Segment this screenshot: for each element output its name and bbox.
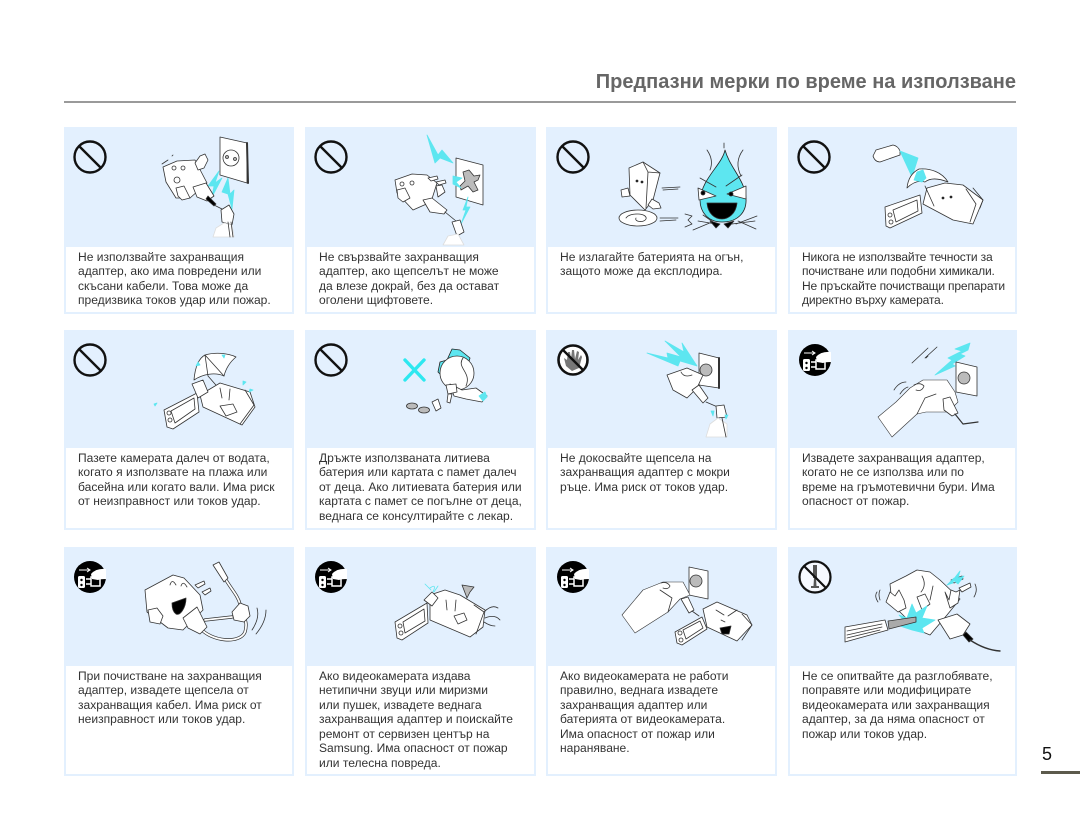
text block: опасност от пожар. — [802, 494, 909, 508]
text block: При почистване на захранващия — [78, 668, 262, 682]
illustration: battery and flame — [619, 143, 757, 230]
text block: батерията от видеокамерата. — [560, 712, 725, 726]
icon: prohibition — [558, 142, 588, 172]
text block: батерия или картата с памет далеч — [319, 465, 517, 479]
text block: ръце. Има риск от токов удар. — [560, 480, 728, 494]
text block: Никога не използвайте течности за — [802, 250, 993, 264]
text block — [790, 448, 1015, 528]
text block: Не излагайте батерията на огън, — [560, 250, 743, 264]
illustration: unplugging a malfunctioning camera — [622, 567, 752, 645]
icon: prohibition — [74, 142, 106, 172]
text block: поправяте или модифицирате — [802, 683, 971, 697]
text block — [307, 247, 534, 312]
illustration: camera under umbrella — [154, 353, 255, 429]
panel: wet hands — [546, 330, 777, 530]
illustration: adapter and cable — [145, 562, 266, 640]
text block: ремонт от сервизен център на — [319, 726, 489, 740]
icon: prohibition — [316, 344, 346, 376]
text block — [548, 247, 775, 312]
text block: адаптер, извадете щепсела от — [78, 683, 249, 697]
text block: от деца. Ако литиевата батерия или — [319, 480, 522, 494]
text block: видеокамерата или захранващия — [802, 698, 990, 712]
text block: Дръжте използваната литиева — [319, 450, 490, 464]
panel: malfunction — [546, 547, 777, 776]
panel: loose plug — [305, 127, 536, 314]
text block: Ако видеокамерата издава — [319, 668, 471, 682]
text block — [66, 247, 292, 312]
panel: battery in fire — [546, 127, 777, 314]
text block — [66, 448, 292, 528]
icon: prohibition — [316, 142, 346, 172]
text block: захранващия адаптер и поискайте — [319, 712, 513, 726]
text block — [307, 666, 534, 774]
text block: Извадете захранващия адаптер, — [802, 450, 985, 464]
text block — [790, 666, 1015, 774]
text block: от неизправност или токов удар. — [78, 494, 261, 508]
text block — [307, 448, 534, 528]
panel: do not disassemble — [788, 547, 1017, 776]
text block: захранващия кабел. Има риск от — [78, 698, 262, 712]
illustration: spray on camera — [873, 145, 983, 228]
text block: правилно, веднага извадете — [560, 683, 718, 697]
text block: адаптер, за да няма опасност от — [802, 712, 985, 726]
illustration: wet hand touching plug — [647, 341, 728, 437]
text block: скъсани кабели. Това може да — [78, 278, 248, 292]
panel: keep away from water — [64, 330, 294, 530]
text block: Не използвайте захранващия — [78, 250, 244, 264]
title: Предпазни мерки по време на използване — [596, 71, 1016, 93]
text block: нетипични звуци или миризми — [319, 683, 488, 697]
text block: картата с памет се погълне от деца, — [319, 494, 522, 508]
icon: no disassembly — [800, 562, 830, 592]
text block: захранващия адаптер или — [560, 698, 707, 712]
text block: или пушек, извадете веднага — [319, 698, 482, 712]
illustration: screwdriver into adapter — [845, 570, 1000, 651]
illustration: unplugging in a storm — [878, 343, 978, 437]
text block: басейна или когато вали. Има риск — [78, 480, 275, 494]
panel: cleaning liquids — [788, 127, 1017, 314]
text block: Не пръскайте почистващи препарати — [802, 278, 1005, 292]
text block: Samsung. Има опасност от пожар — [319, 741, 508, 755]
text block: Има опасност от пожар или — [560, 726, 715, 740]
text block: пожар или токов удар. — [802, 726, 927, 740]
illustration: child with battery — [405, 349, 487, 413]
icon: unplug — [557, 561, 589, 593]
text block: защото може да експлодира. — [560, 264, 723, 278]
icon: prohibition — [798, 142, 830, 172]
text block: Пазете камерата далеч от водата, — [78, 450, 270, 464]
panel: keep from children — [305, 330, 536, 530]
text block: Ако видеокамерата не работи — [560, 668, 729, 682]
icon: no touching — [558, 346, 588, 374]
text block: когато я използвате на плажа или — [78, 465, 267, 479]
text block: оголени щифтовете. — [319, 293, 433, 307]
text block: захранващия адаптер с мокри — [560, 465, 730, 479]
text block — [548, 448, 775, 528]
panel: abnormal sounds — [305, 547, 536, 776]
text block: предизвика токов удар или пожар. — [78, 293, 271, 307]
icon: unplug — [315, 561, 347, 593]
text block — [790, 247, 1015, 312]
text block: или телесна повреда. — [319, 756, 441, 770]
icon: unplug — [799, 344, 831, 376]
text block: почистване или подобни химикали. — [802, 264, 995, 278]
text block: да влезе докрай, без да остават — [319, 278, 499, 292]
text block: неизправност или токов удар. — [78, 712, 245, 726]
text block: Не докосвайте щепсела на — [560, 450, 711, 464]
text block: нараняване. — [560, 741, 630, 755]
text block: Не свързвайте захранващия — [319, 250, 479, 264]
text block: Не се опитвайте да разглобявате, — [802, 668, 993, 682]
panel: storms — [788, 330, 1017, 530]
panel: cleaning adapter — [64, 547, 294, 776]
text block: адаптер, ако щепселът не може — [319, 264, 499, 278]
text block: адаптер, ако има повредени или — [78, 264, 261, 278]
text block: време на гръмотевични бури. Има — [802, 480, 995, 494]
panel: damaged cables — [64, 127, 294, 314]
illustration: plug that does not fit — [395, 135, 483, 245]
icon: prohibition — [74, 344, 106, 376]
text block — [548, 666, 775, 774]
illustration: damaged adapter at outlet — [162, 137, 248, 237]
text block — [66, 666, 292, 774]
illustration: camera with smoke — [395, 584, 500, 640]
text block: директно върху камерата. — [802, 293, 944, 307]
text block: когато не се използва или по — [802, 465, 964, 479]
icon: unplug — [74, 561, 106, 593]
page number: 5 — [1042, 744, 1052, 764]
text block: веднага се консултирайте с лекар. — [319, 508, 513, 522]
